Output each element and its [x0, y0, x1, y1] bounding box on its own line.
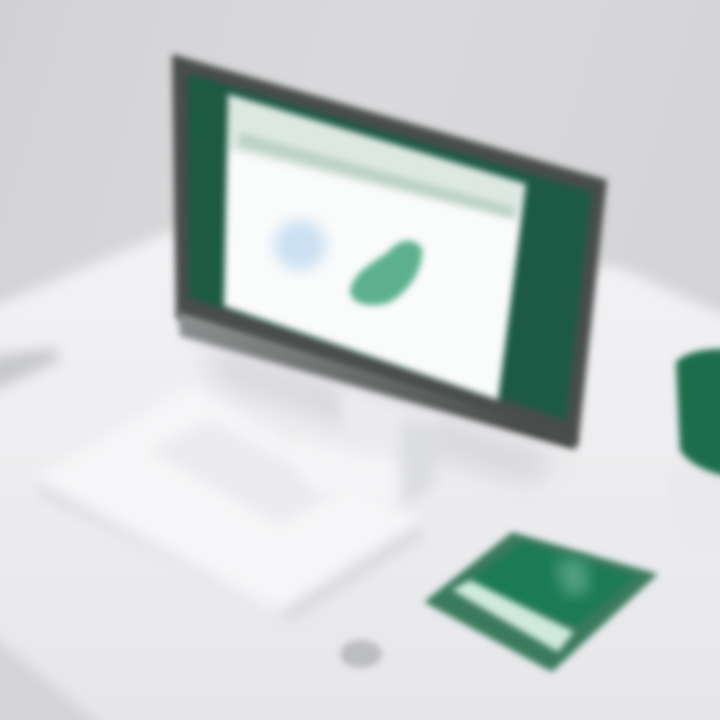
window header: [228, 94, 526, 222]
monitor shadow on desk: [200, 340, 560, 485]
desk surface: [0, 232, 720, 720]
green screen: [188, 74, 592, 420]
tablet screen: [456, 542, 636, 626]
mouse: [340, 640, 382, 668]
mug green body: [676, 349, 720, 478]
blue chart blob: [274, 220, 326, 270]
mug: [667, 349, 720, 552]
item at left edge: [0, 348, 60, 392]
tablet body: [424, 532, 658, 672]
monitor: [172, 54, 607, 450]
application window: [224, 94, 526, 400]
monitor lower chin: [178, 312, 576, 450]
keyboard: [35, 385, 424, 620]
green chart blob: [350, 241, 422, 305]
mug base: [667, 470, 720, 552]
monitor bezel: [172, 54, 607, 446]
tablet bright detail: [555, 558, 590, 596]
left green band shading: [192, 80, 226, 306]
monitor stand: [290, 385, 445, 510]
tablet light strip: [452, 580, 574, 652]
tablet: [424, 532, 658, 672]
